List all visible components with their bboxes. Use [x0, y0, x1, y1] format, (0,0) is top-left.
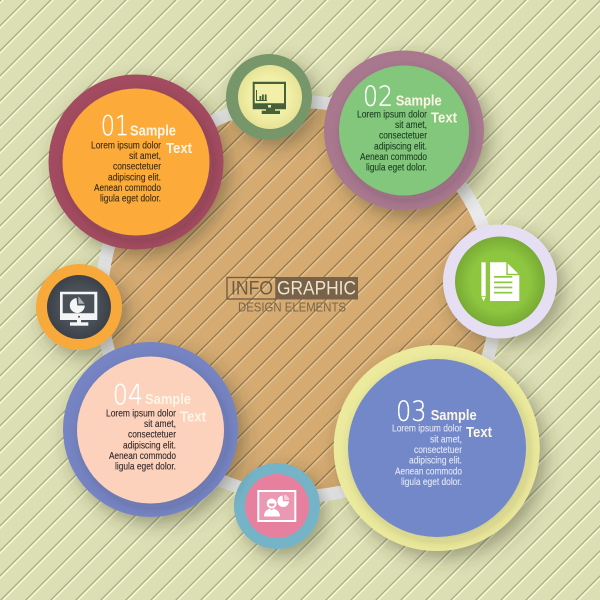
heading 04: Sample	[145, 392, 191, 408]
body text 01: consectetuer	[113, 162, 161, 173]
body text 02	[357, 109, 427, 174]
heading 01	[130, 124, 192, 157]
body text 04: sit amet,	[144, 419, 176, 430]
title box: INFO outline	[227, 278, 276, 299]
body text 02: adipiscing elit.	[374, 141, 427, 152]
number 03: 03	[396, 395, 426, 428]
body text 03: Aenean commodo	[395, 466, 462, 477]
heading 03: Text	[466, 425, 492, 441]
panel 04	[63, 342, 238, 517]
title word: GRAPHIC: GRAPHIC	[277, 279, 356, 300]
center title	[227, 277, 358, 315]
title word: INFO: INFO	[231, 279, 273, 300]
heading 01: Text	[166, 141, 192, 157]
heading 01: Sample	[130, 124, 176, 140]
body text 04: ligula eget dolor.	[115, 462, 176, 473]
heading 03	[431, 408, 492, 441]
body text 02: ligula eget dolor.	[366, 163, 427, 174]
central tan disc with ring	[101, 101, 497, 497]
body text 03: ligula eget dolor.	[401, 477, 462, 488]
body text 02: Aenean commodo	[360, 152, 427, 163]
number 02: 02	[363, 80, 393, 113]
heading 02: Text	[431, 111, 457, 127]
body text 01: adipiscing elit.	[108, 172, 161, 183]
icon: pencil and document	[481, 262, 519, 301]
number 01: 01	[101, 109, 129, 142]
body text 03: sit amet,	[430, 434, 462, 445]
body text 02: consectetuer	[379, 131, 427, 142]
subtitle: DESIGN ELEMENTS	[238, 301, 346, 315]
body text 03: Lorem ipsum dolor	[392, 424, 462, 435]
title box: GRAPHIC filled	[276, 277, 358, 300]
body text 04: Lorem ipsum dolor	[106, 408, 176, 419]
heading 02: Sample	[396, 94, 442, 110]
panel 02	[324, 50, 484, 210]
heading 03: Sample	[431, 408, 477, 424]
body text 02: sit amet,	[395, 120, 427, 131]
body text 01	[91, 140, 161, 205]
icon: presenter board	[258, 491, 295, 521]
body text 04: adipiscing elit.	[123, 440, 176, 451]
body text 01: sit amet,	[129, 151, 161, 162]
heading 04: Text	[180, 410, 206, 426]
heading 04	[145, 392, 206, 426]
heading 02	[396, 94, 457, 127]
icon: monitor with bar chart	[253, 82, 286, 114]
panel 03	[334, 345, 540, 551]
body text 04	[106, 408, 176, 473]
body text 04: Aenean commodo	[109, 451, 176, 462]
body text 04: consectetuer	[128, 430, 176, 441]
body text 01: Aenean commodo	[94, 183, 161, 194]
body text 03: adipiscing elit.	[409, 456, 462, 467]
node: bottom presentation icon	[234, 463, 320, 549]
number 04: 04	[113, 378, 143, 411]
body text 03	[392, 424, 462, 488]
node: top monitor icon	[226, 54, 312, 140]
body text 02: Lorem ipsum dolor	[357, 109, 427, 120]
body text 01: ligula eget dolor.	[100, 194, 161, 205]
icon: monitor with pie chart	[60, 292, 97, 326]
body text 01: Lorem ipsum dolor	[91, 140, 161, 151]
body text 03: consectetuer	[414, 445, 462, 456]
panel 01	[48, 74, 224, 250]
node: left monitor icon	[36, 264, 122, 350]
node: right document icon	[443, 224, 557, 338]
